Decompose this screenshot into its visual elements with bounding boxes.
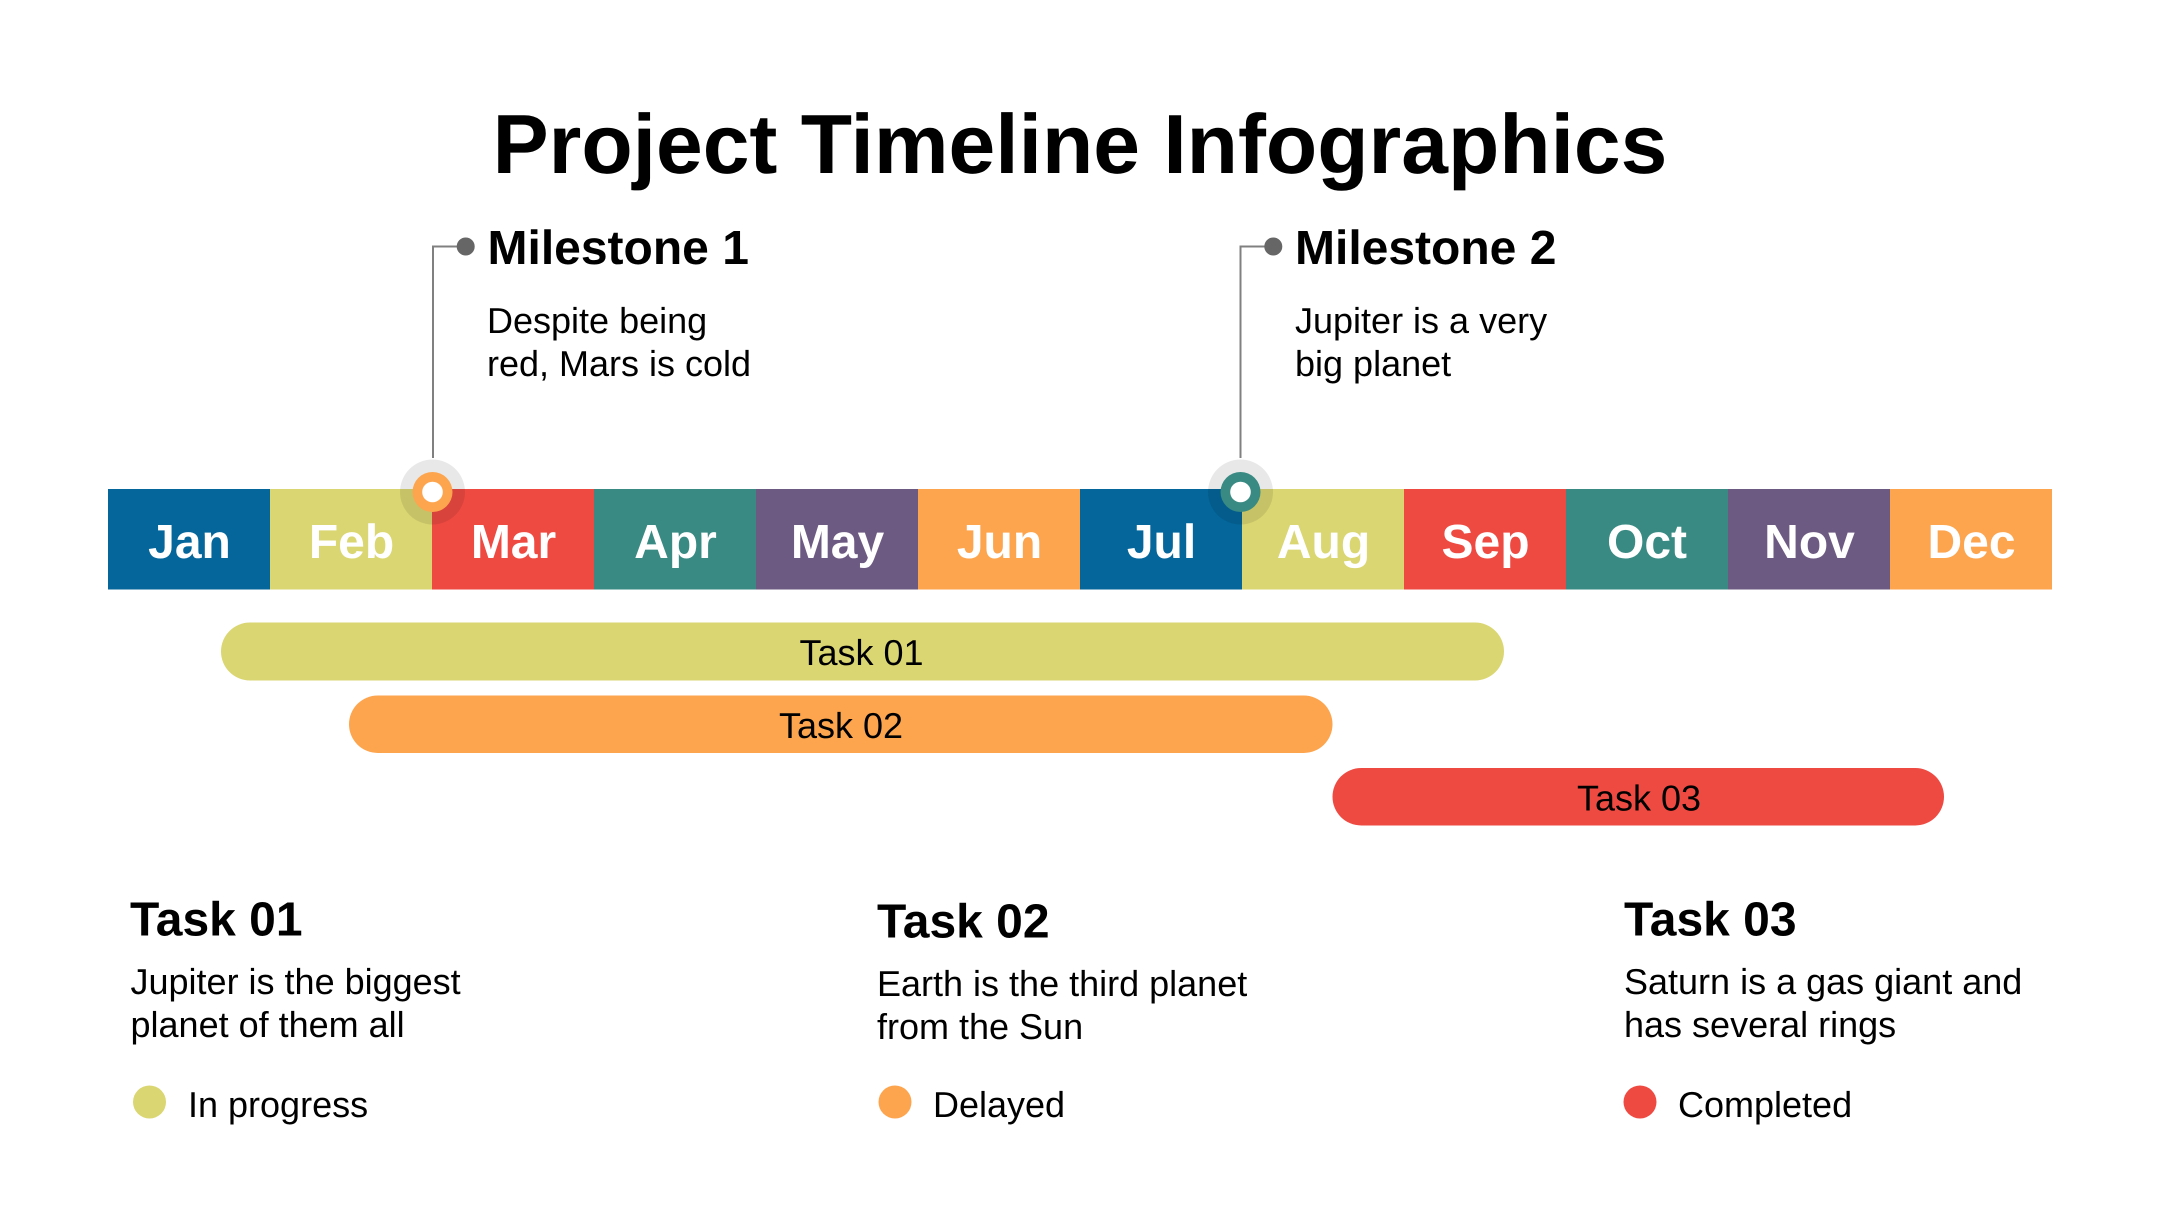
month: Jun (918, 489, 1080, 590)
panel: Task 03 details (1624, 894, 2022, 1125)
month: Jul: Jul (1127, 516, 1196, 569)
month: Jan (108, 489, 270, 590)
milestone 2 heading: Milestone 2 (1295, 222, 1556, 275)
legend: In progress: In progress (188, 1084, 368, 1125)
month: Feb (270, 489, 432, 590)
month: Oct: Oct (1607, 516, 1687, 569)
month: May: May (791, 516, 884, 569)
panel: Task 01 details (130, 894, 461, 1125)
milestone 1 connector (433, 238, 475, 458)
month: Aug: Aug (1277, 516, 1370, 569)
Task 01 description: Jupiter is the biggest (130, 961, 461, 1002)
milestone 1 description: red, Mars is cold (487, 343, 751, 384)
month: Dec (1890, 489, 2052, 590)
Task 01 heading: Task 01 (130, 894, 303, 946)
milestone 1 marker (400, 460, 465, 524)
month: Nov: Nov (1764, 516, 1855, 569)
month: Apr: Apr (634, 516, 717, 569)
milestone 2 marker (1208, 460, 1273, 524)
legend: Completed: Completed (1678, 1084, 1852, 1125)
month: Jun: Jun (957, 516, 1042, 569)
month: May (756, 489, 918, 590)
month: Mar: Mar (471, 516, 556, 569)
milestone 1 callout (433, 222, 751, 458)
month: Sep (1404, 489, 1566, 590)
Task 03 heading: Task 03 (1624, 894, 1797, 946)
Task 03 description: Saturn is a gas giant and (1624, 961, 2022, 1002)
milestone 2 description: big planet (1295, 343, 1451, 384)
milestone 2 callout (1240, 222, 1556, 458)
month: Aug (1242, 489, 1404, 590)
gantt bar: Task 01: Task 01 (799, 632, 924, 673)
milestone 1 description: Despite being (487, 300, 707, 341)
month: Oct (1566, 489, 1728, 590)
gantt bar: Task 03 (1332, 768, 1944, 826)
Task 01 description: planet of them all (130, 1004, 405, 1045)
month timeline bar (108, 489, 2052, 590)
Task 02 description: from the Sun (877, 1006, 1083, 1047)
gantt bar: Task 02 (349, 696, 1332, 753)
month: Sep: Sep (1441, 516, 1530, 569)
month: Apr (594, 489, 756, 590)
Task 03 description: has several rings (1624, 1004, 1896, 1045)
Task 02 heading: Task 02 (877, 896, 1050, 948)
month: Dec: Dec (1927, 516, 2016, 569)
legend: Delayed: Delayed (933, 1084, 1065, 1125)
milestone 2 connector (1240, 238, 1282, 458)
month: Mar (432, 489, 594, 590)
month: Jan: Jan (148, 516, 231, 569)
month: Feb: Feb (309, 516, 394, 569)
Task 02 description: Earth is the third planet (877, 963, 1247, 1004)
month: Jul (1080, 489, 1242, 590)
month: Nov (1728, 489, 1890, 590)
gantt bar: Task 01 (221, 622, 1504, 680)
milestone 2 description: Jupiter is a very (1295, 300, 1547, 341)
panel: Task 02 details (877, 896, 1247, 1125)
milestone 1 heading: Milestone 1 (488, 222, 749, 275)
gantt bar: Task 02: Task 02 (779, 705, 903, 746)
title: Project Timeline Infographics (493, 97, 1667, 191)
gantt bar: Task 03: Task 03 (1577, 778, 1701, 818)
